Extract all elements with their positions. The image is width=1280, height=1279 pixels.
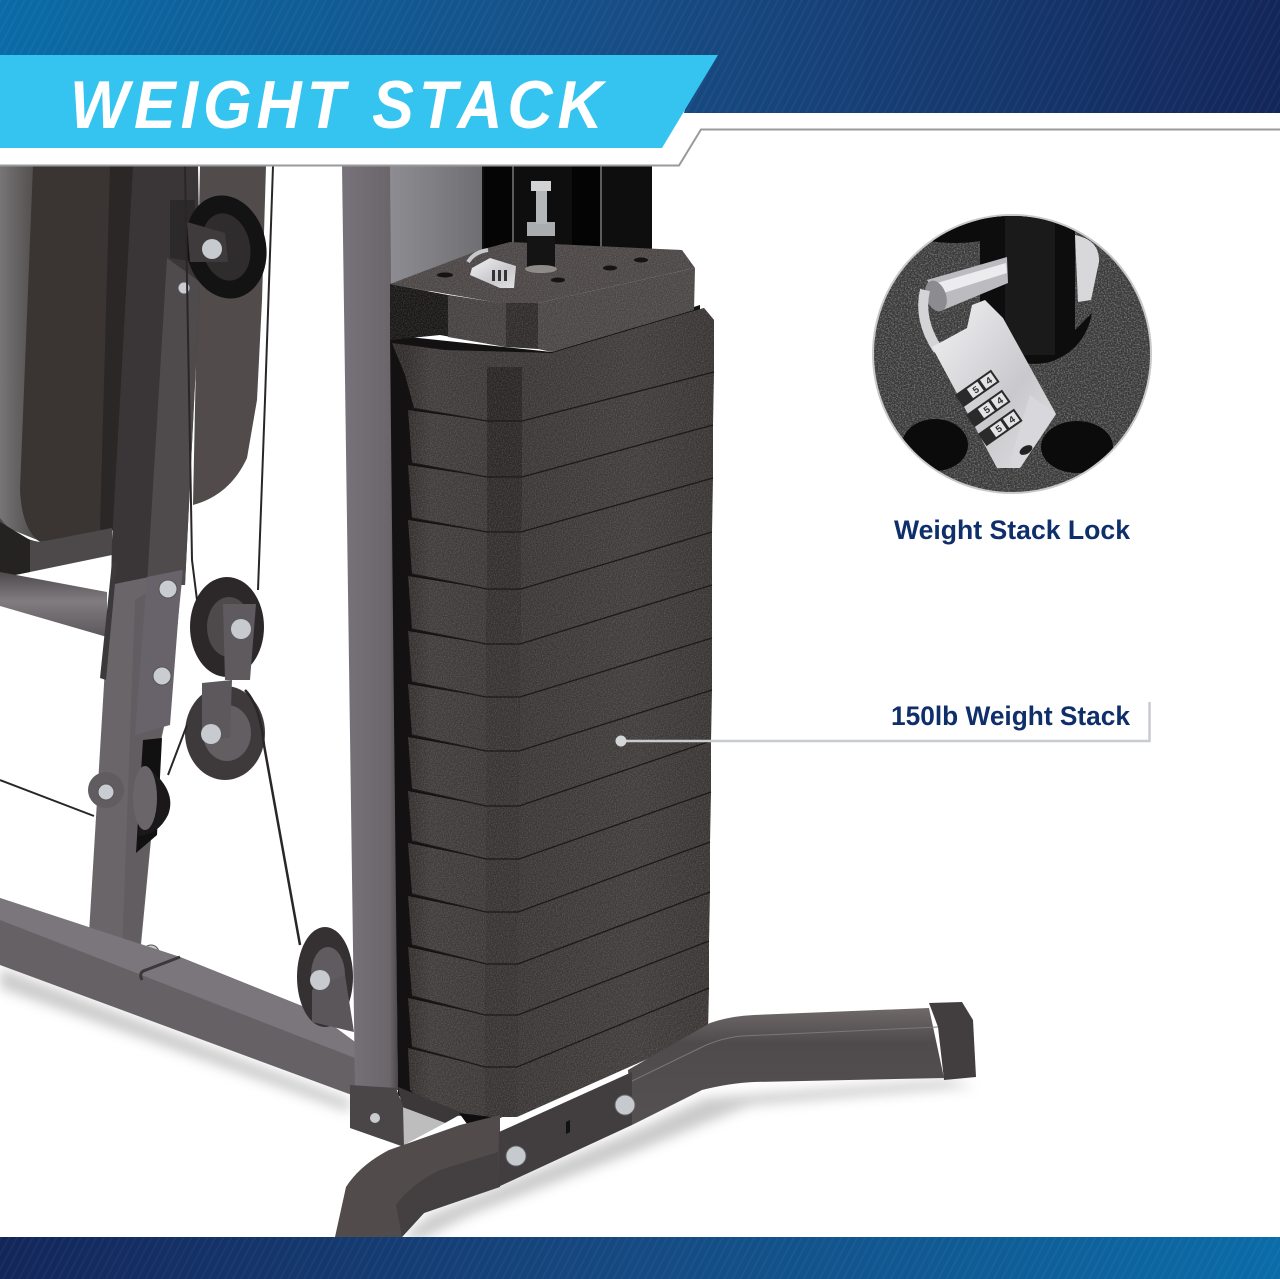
plate 2	[408, 372, 714, 477]
top header band	[0, 0, 1280, 113]
pulley: top	[187, 196, 267, 298]
plate 7	[408, 638, 712, 751]
keyhole	[1018, 443, 1034, 457]
combination dials: 5	[982, 405, 993, 417]
mounting holes	[902, 419, 968, 471]
floor foot	[335, 1008, 944, 1237]
combination dials: 5	[971, 385, 982, 397]
selector plate holes	[437, 258, 648, 282]
selector top plate	[390, 242, 695, 352]
seat back cushion	[0, 166, 266, 578]
under-stack crossbar	[398, 1087, 500, 1146]
upright back panel and guide rods	[385, 166, 652, 291]
frame bolts	[98, 282, 190, 961]
plate 10	[408, 792, 711, 912]
weight stack plates	[392, 308, 714, 1117]
callout: 150lb weight stack	[616, 701, 1150, 746]
angled support frame	[88, 166, 200, 955]
cables	[0, 166, 300, 945]
bottom band	[0, 1237, 1280, 1279]
pulley: lower middle	[185, 680, 265, 780]
textured plate surface	[870, 212, 1155, 497]
plate 11	[408, 842, 710, 964]
white header cutout with grey outline	[0, 55, 1280, 166]
base rail	[0, 898, 360, 1098]
callout text: 150lb Weight Stack	[891, 701, 1131, 731]
title banner	[0, 55, 718, 148]
selector pin	[525, 181, 557, 273]
plate 14	[408, 988, 709, 1117]
plate 12	[408, 892, 710, 1015]
product photo: home gym weight stack	[0, 166, 976, 1240]
plate 8	[408, 690, 712, 806]
foot end cap	[929, 1002, 976, 1080]
inset circle: weight stack lock	[870, 207, 1155, 497]
cable pulleys	[176, 188, 354, 1032]
column base bracket	[350, 1085, 404, 1147]
plate 4	[408, 478, 713, 589]
foot bracket with bolts	[498, 1072, 635, 1187]
dark backing behind stack	[390, 305, 706, 1118]
callout leader line	[623, 702, 1150, 741]
combination dials: 4	[995, 396, 1007, 408]
main column	[342, 166, 398, 1090]
floor shadows	[0, 968, 975, 1240]
right hook	[1075, 235, 1099, 302]
pulley: upper middle	[190, 577, 264, 680]
lock body	[932, 300, 1056, 468]
label: weight stack lock: Weight Stack Lock	[894, 515, 1131, 545]
combination dials	[955, 370, 1023, 446]
combination dials: 4	[984, 376, 996, 388]
combination dials: 5	[994, 424, 1005, 436]
pulley: bottom	[297, 927, 354, 1032]
combination dials: 4	[1007, 415, 1019, 427]
plate 9	[408, 741, 711, 859]
small lock on stack	[468, 250, 516, 288]
horizontal seat tube	[0, 572, 107, 637]
plate 3	[408, 425, 713, 532]
silver pin	[927, 257, 1008, 310]
callout dot	[616, 736, 626, 746]
lock shackle	[923, 290, 938, 350]
plate 1	[392, 308, 714, 421]
plate separator lines	[412, 372, 714, 1067]
back shadow	[900, 207, 1010, 243]
plate 6	[408, 585, 712, 697]
plate 13	[408, 941, 709, 1067]
plate 5	[408, 532, 712, 644]
title: WEIGHT STACK	[70, 67, 607, 143]
